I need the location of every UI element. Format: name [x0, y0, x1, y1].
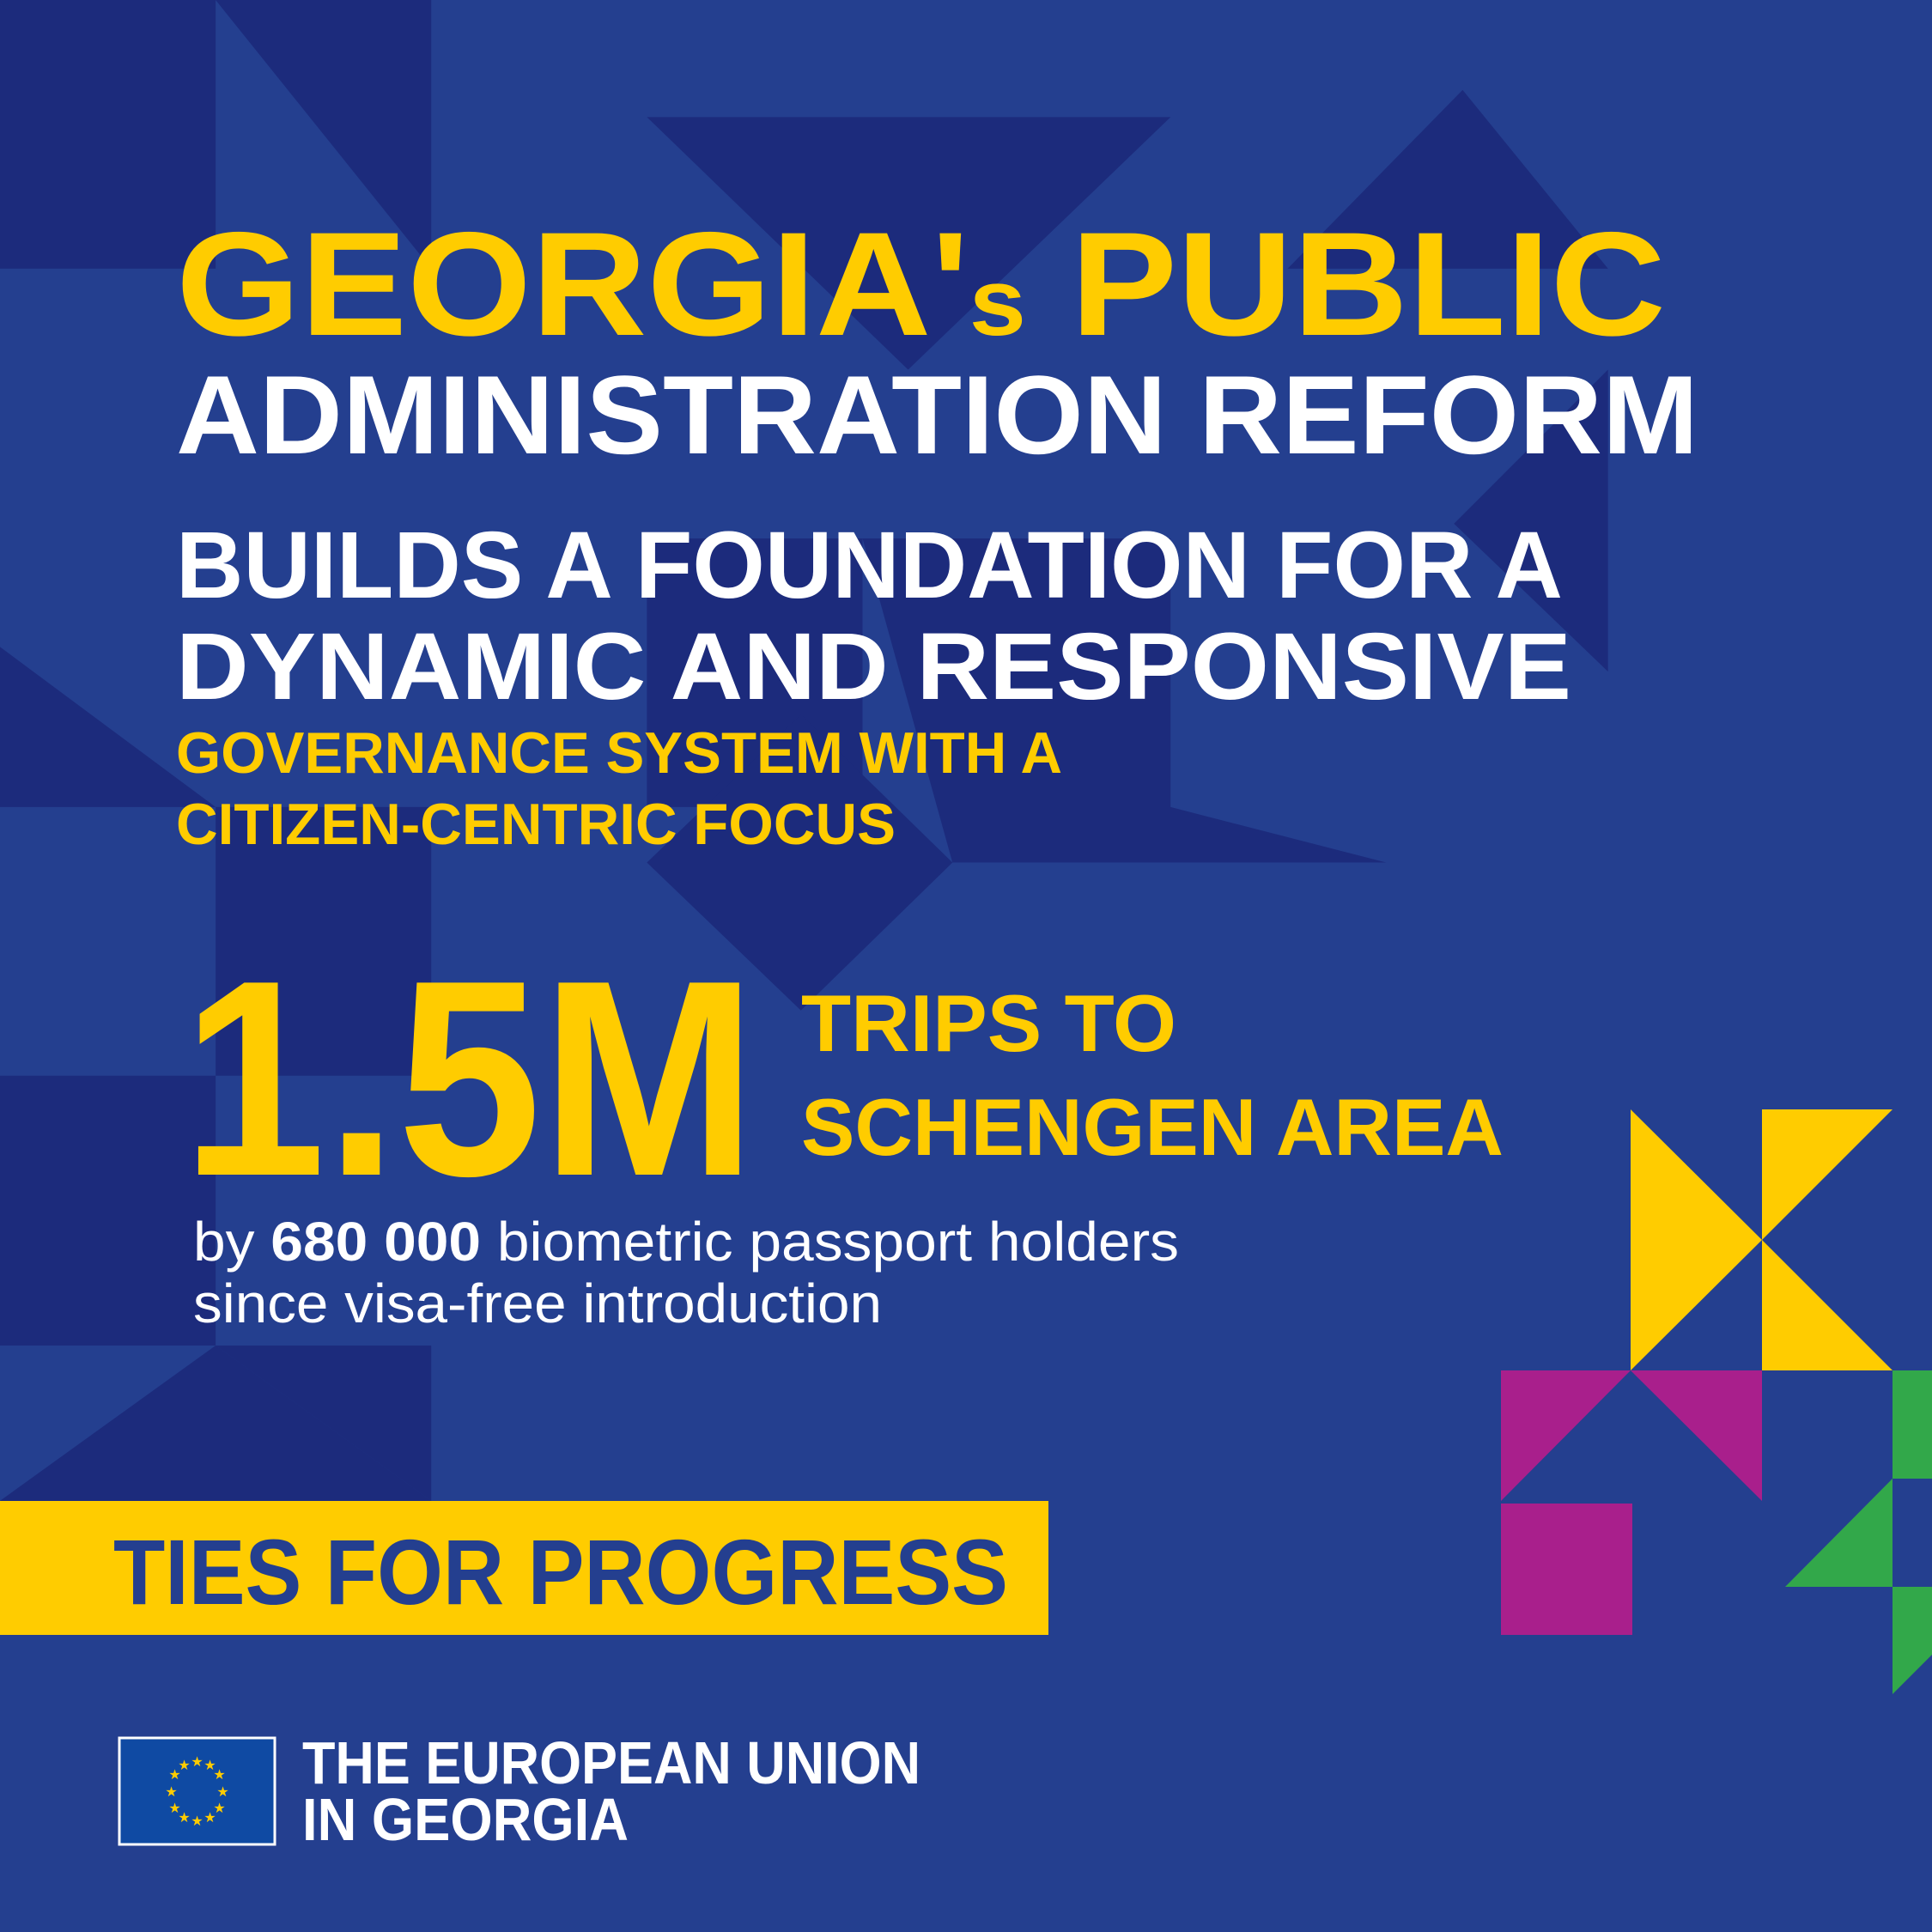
footer: EU in Georgia: THE EUROPEAN UNION	[302, 1729, 920, 1796]
banner: ties for progress: TIES FOR PROGRESS	[113, 1520, 1008, 1624]
background pattern	[0, 0, 1608, 1501]
icon: EU flag: ★	[216, 1785, 229, 1800]
subtitle: DYNAMIC AND RESPONSIVE	[176, 614, 1571, 720]
icon: EU flag: ★	[168, 1768, 181, 1783]
footer: EU in Georgia: IN GEORGIA	[302, 1786, 629, 1853]
statistic description	[193, 1211, 1179, 1334]
subtitle: CITIZEN-CENTRIC FOCUS	[176, 792, 896, 857]
statistic: 1.5M trips: TRIPS TO	[801, 978, 1176, 1068]
icon: EU flag: ★	[213, 1801, 226, 1816]
title	[176, 202, 1698, 477]
statistic: 1.5M trips: SCHENGEN AREA	[801, 1082, 1504, 1172]
icon: EU flag: ★	[168, 1801, 181, 1816]
statistic: 1.5M trips	[182, 922, 1504, 1234]
statistic description: since visa-free introduction	[193, 1273, 882, 1334]
banner: ties for progress	[0, 1501, 1048, 1635]
icon: EU flag: ★	[165, 1785, 178, 1800]
icon: EU flag: ★	[213, 1768, 226, 1783]
title: ADMINISTRATION REFORM	[176, 352, 1698, 477]
title: GEORGIA' s PUBLIC	[176, 202, 1666, 367]
icon: EU flag: ★	[178, 1759, 191, 1773]
icon: EU flag: ★	[204, 1811, 216, 1826]
icon: EU flag: ★	[191, 1814, 204, 1829]
decorative shapes: magenta	[1501, 1370, 1762, 1635]
statistic description: by 680 000 biometric passport holders	[193, 1211, 1179, 1273]
subtitle: BUILDS A FOUNDATION FOR A	[176, 513, 1563, 618]
subtitle: GOVERNANCE SYSTEM WITH A	[176, 720, 1062, 786]
subtitle	[176, 513, 1571, 857]
footer: EU in Georgia	[302, 1729, 920, 1853]
decorative shapes: yellow triangles	[1631, 1109, 1893, 1370]
icon: EU flag	[119, 1738, 275, 1844]
icon: EU flag: ★	[178, 1811, 191, 1826]
decorative shapes: green	[1785, 1370, 1932, 1694]
statistic: 1.5M trips: 1.5M	[182, 922, 756, 1234]
icon: EU flag: ★	[191, 1755, 204, 1770]
icon: EU flag: ★	[204, 1759, 216, 1773]
